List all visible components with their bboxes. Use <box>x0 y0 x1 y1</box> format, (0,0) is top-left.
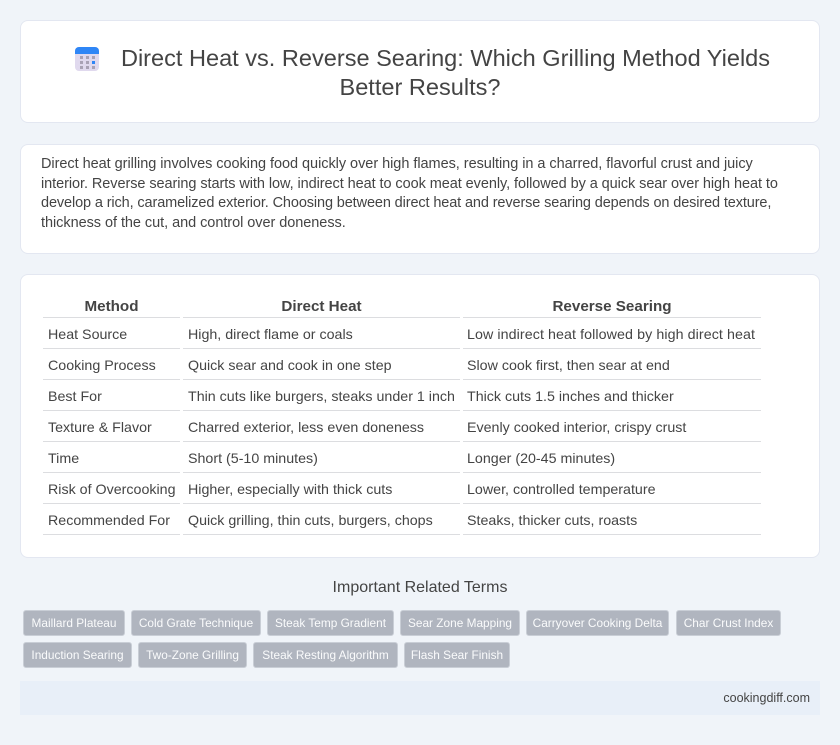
related term tags: Steak Temp Gradient <box>275 616 386 630</box>
comparison table: Cooking Process <box>48 358 156 374</box>
panel: comparison table <box>20 274 820 558</box>
comparison table: Direct Heat <box>281 298 362 315</box>
comparison table: Higher, especially with thick cuts <box>188 482 392 498</box>
intro text <box>41 156 778 231</box>
comparison table: High, direct flame or coals <box>188 327 353 343</box>
icon: calendar <box>75 47 99 71</box>
related term tags <box>23 610 781 668</box>
comparison table: Longer (20-45 minutes) <box>467 451 615 467</box>
related term tags: Induction Searing <box>31 648 124 662</box>
comparison table: Recommended For <box>48 513 170 529</box>
related term tags: Steak Resting Algorithm <box>262 648 389 662</box>
related term tags: Maillard Plateau <box>32 616 116 630</box>
intro text: interior. Reverse searing starts with low, indirect heat to cook meat evenly, followed by a quick sear over high heat to <box>41 176 778 192</box>
comparison table: Texture & Flavor <box>48 420 152 436</box>
related term tags: Two-Zone Grilling <box>146 648 239 662</box>
comparison table: Quick grilling, thin cuts, burgers, chops <box>188 513 433 529</box>
comparison table: Time <box>48 451 79 467</box>
comparison table: Lower, controlled temperature <box>467 482 656 498</box>
comparison table <box>43 298 761 535</box>
related term tags: Flash Sear Finish <box>411 648 503 662</box>
title: Better Results? <box>340 74 500 100</box>
comparison table: Thick cuts 1.5 inches and thicker <box>467 389 674 405</box>
comparison table: Charred exterior, less even doneness <box>188 420 424 436</box>
intro text: Direct heat grilling involves cooking food quickly over high flames, resulting in a charred, flavorful crust and juicy <box>41 156 753 172</box>
comparison table: Heat Source <box>48 327 127 343</box>
panel: header <box>20 20 820 123</box>
comparison table: Reverse Searing <box>552 298 672 315</box>
intro text: thickness of the cut, and control over doneness. <box>41 215 346 231</box>
comparison table: Short (5-10 minutes) <box>188 451 318 467</box>
comparison table: Evenly cooked interior, crispy crust <box>467 420 686 436</box>
comparison table: Low indirect heat followed by high direct heat <box>467 327 755 343</box>
comparison table: Best For <box>48 389 102 405</box>
related term tags: Carryover Cooking Delta <box>533 616 662 630</box>
footer source: cookingdiff.com <box>723 691 810 705</box>
comparison table: Slow cook first, then sear at end <box>467 358 670 374</box>
comparison table: Quick sear and cook in one step <box>188 358 392 374</box>
comparison table: Risk of Overcooking <box>48 482 176 498</box>
intro text: develop a rich, caramelized exterior. Choosing between direct heat and reverse searing depends on desired texture, <box>41 195 771 211</box>
related term tags: Cold Grate Technique <box>139 616 253 630</box>
comparison table: Thin cuts like burgers, steaks under 1 inch <box>188 389 455 405</box>
related term tags: Sear Zone Mapping <box>408 616 512 630</box>
related term tags: Char Crust Index <box>684 616 773 630</box>
comparison table: Steaks, thicker cuts, roasts <box>467 513 637 529</box>
comparison table: Method <box>84 298 138 315</box>
footer bar <box>20 681 820 715</box>
title: Direct Heat vs. Reverse Searing: Which Grilling Method Yields <box>121 45 770 71</box>
panel: introduction <box>20 144 820 254</box>
heading: related terms: Important Related Terms <box>333 579 507 596</box>
title <box>121 45 770 100</box>
